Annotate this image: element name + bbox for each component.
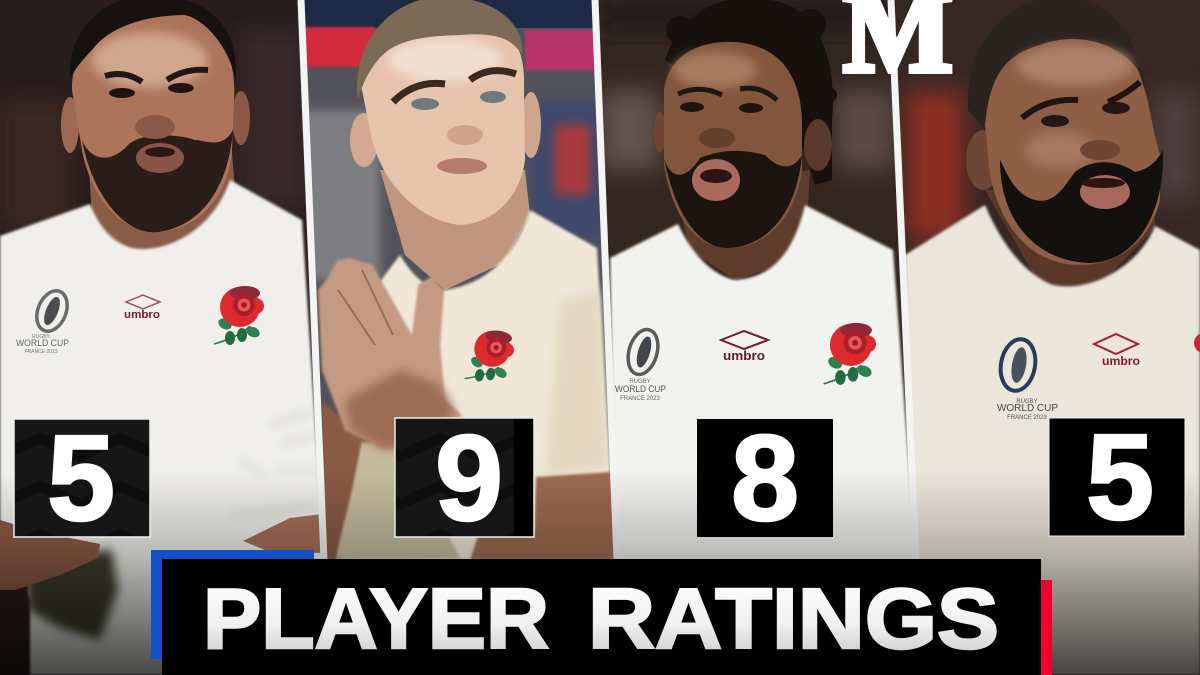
player 4 rose edge <box>1194 333 1200 353</box>
rating box: 5: 5 <box>1086 409 1154 545</box>
player 2 head <box>350 0 541 225</box>
player 3 world cup badge: WORLD CUP <box>615 384 666 394</box>
player 3 shirt <box>608 204 912 559</box>
player 4 umbro logo <box>1094 334 1140 368</box>
player 1 world cup badge <box>16 289 69 353</box>
player 2 clapping hands <box>318 258 462 560</box>
player 3 world cup badge <box>615 326 666 402</box>
panel: player 2 <box>304 0 614 559</box>
player 1 world cup badge: FRANCE 2023 <box>24 349 58 355</box>
rating box: 5: 5 <box>47 410 115 546</box>
player 4 world cup badge: FRANCE 2023 <box>1007 415 1048 421</box>
player 3 neck <box>675 170 810 280</box>
player 4 neck <box>985 190 1155 285</box>
player 1 neck <box>90 151 234 250</box>
rating box: 9 <box>395 410 534 546</box>
player 1 rose <box>214 286 264 345</box>
rating box: 5 <box>1049 409 1185 545</box>
title banner <box>162 559 1041 675</box>
player 4 world cup badge <box>997 336 1058 421</box>
player 2 sleeve <box>545 290 609 476</box>
player 3 world cup badge: FRANCE 2023 <box>620 396 661 402</box>
banner accent: red <box>1041 580 1052 675</box>
player 4 head <box>966 0 1163 265</box>
player 3 umbro logo <box>721 331 768 363</box>
player 3 umbro logo: umbro <box>723 348 765 363</box>
player 2 forearm <box>470 472 617 560</box>
player 1 umbro logo: umbro <box>124 309 160 321</box>
player 1 shirt creases <box>230 412 316 515</box>
panel dividers <box>301 0 916 560</box>
player 2 shirt <box>340 208 613 559</box>
player 1 world cup badge: WORLD CUP <box>16 338 69 348</box>
player 4 world cup badge: RUGBY <box>1016 399 1038 405</box>
player 4 umbro logo: umbro <box>1102 354 1140 368</box>
rating box: 8 <box>697 410 833 546</box>
rating box: 8: 8 <box>731 410 799 546</box>
player 1 umbro logo <box>124 295 160 321</box>
player 2 rose <box>464 330 514 382</box>
banner accent: blue <box>151 550 314 659</box>
player 3 world cup badge: RUGBY <box>629 379 651 385</box>
player 4 world cup badge: WORLD CUP <box>997 403 1058 414</box>
player 1 world cup badge: RUGBY <box>32 334 51 340</box>
player 1 stain <box>25 550 118 640</box>
title banner: RATINGS <box>588 572 999 667</box>
player 4 shirt <box>905 205 1200 675</box>
bottom shading <box>0 470 1200 675</box>
player 2 lower shirt <box>335 440 460 560</box>
title banner: PLAYER <box>203 572 549 667</box>
player 1 head <box>61 0 250 232</box>
player 1 left hand <box>0 520 100 590</box>
player 1 right hand <box>243 514 324 553</box>
player 1 shirt <box>0 180 324 675</box>
player 3 head <box>654 0 837 248</box>
rating box: 5 <box>14 410 150 546</box>
panel: player 3 <box>598 0 912 559</box>
panel: player 1 <box>0 0 330 675</box>
rating box: 9: 9 <box>435 410 503 546</box>
player 3 rose <box>824 323 876 385</box>
panel: player 4 <box>890 0 1200 675</box>
player 2 neck <box>380 170 530 290</box>
